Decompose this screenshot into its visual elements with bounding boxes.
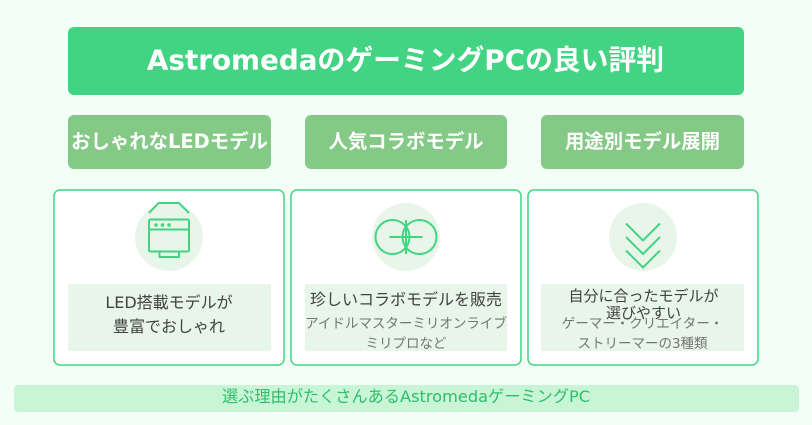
- heading: collaboration models: 人気コラボモデル: [328, 130, 484, 153]
- text block: LED description: [68, 284, 271, 351]
- heading: LED models: [68, 115, 271, 169]
- text block: use description: 選びやすい: [606, 304, 681, 322]
- footer banner: 選ぶ理由がたくさんあるAstromedaゲーミングPC: [222, 387, 590, 406]
- text block: LED description: 豊富でおしゃれ: [113, 317, 225, 336]
- heading: LED models: おしゃれなLEDモデル: [71, 130, 268, 153]
- text block: collaboration description: ミリプロなど: [366, 336, 447, 352]
- icon: overlapping circles: [372, 203, 440, 271]
- text block: LED description: LED搭載モデルが: [105, 293, 233, 312]
- title banner: AstromedaのゲーミングPCの良い評判: [147, 44, 664, 76]
- text block: use description: [541, 284, 744, 352]
- heading: models by use: [541, 115, 744, 169]
- heading: models by use: 用途別モデル展開: [565, 130, 720, 153]
- text block: use description: 自分に合ったモデルが: [568, 287, 719, 305]
- text block: collaboration description: 珍しいコラボモデルを販売: [310, 290, 502, 309]
- panel: models by use: [528, 190, 758, 365]
- text block: use description: ゲーマー・クリエイター・: [562, 316, 723, 332]
- icon: PC monitor with LED: [135, 203, 203, 271]
- icon: triple down chevrons: [609, 203, 677, 271]
- footer banner: [14, 385, 799, 412]
- title banner: [68, 27, 744, 95]
- text block: use description: ストリーマーの3種類: [577, 336, 708, 352]
- text block: collaboration description: [305, 284, 507, 352]
- panel: LED models: [54, 190, 284, 365]
- panel: collaboration models: [291, 190, 521, 365]
- heading: collaboration models: [305, 115, 507, 169]
- text block: collaboration description: アイドルマスターミリオンライブ: [305, 315, 507, 332]
